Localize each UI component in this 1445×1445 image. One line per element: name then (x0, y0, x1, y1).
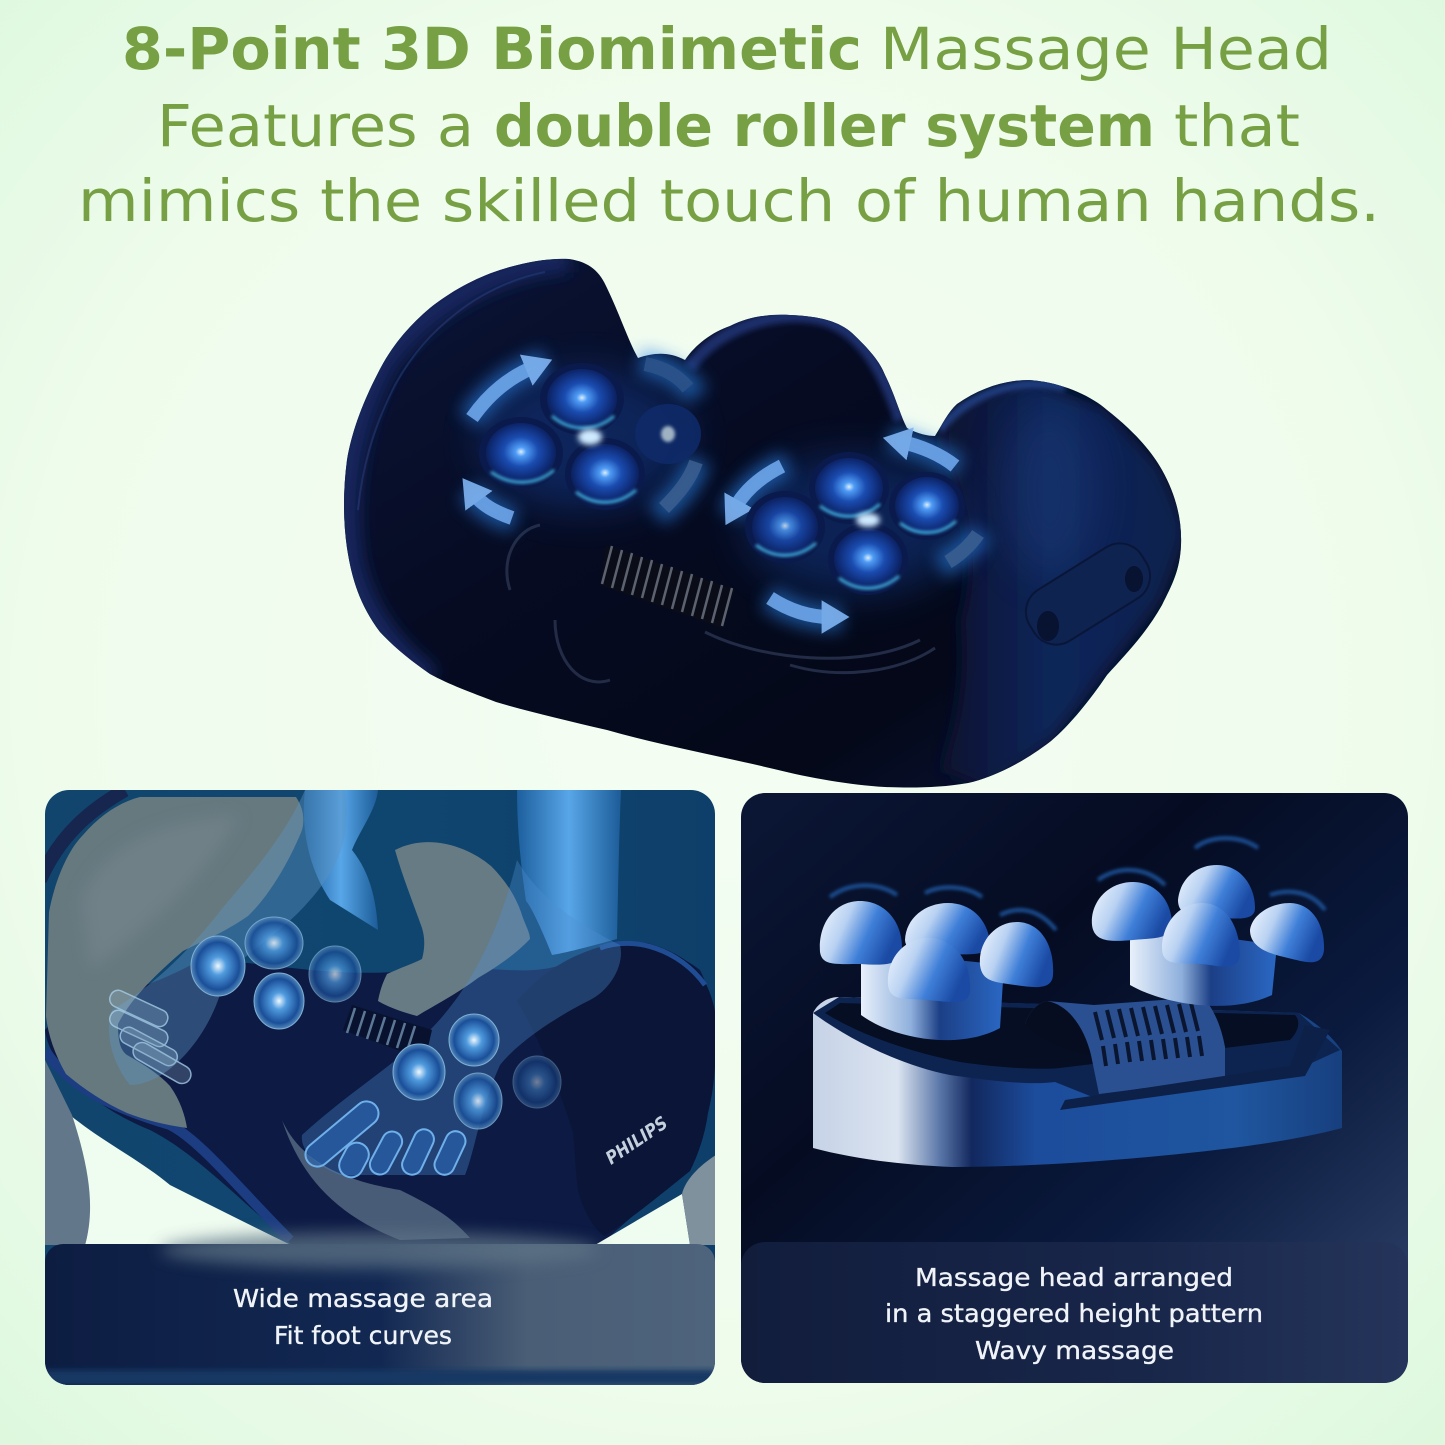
roller (565, 438, 645, 510)
arrow (735, 466, 782, 508)
arrow (472, 367, 534, 418)
main product: foot massager (344, 259, 1190, 790)
right lobe sheen (1005, 405, 1095, 575)
card illustration (40, 789, 716, 1385)
left roller group (479, 363, 701, 510)
arrow (474, 494, 512, 518)
roller (309, 946, 361, 1002)
card background (741, 793, 1408, 1383)
right lobe rim (940, 384, 1065, 430)
left smudge (45, 1060, 90, 1245)
title line 3: mimics the skilled touch of human hands. (78, 167, 1380, 235)
right toes (304, 1100, 466, 1178)
bold part: 8-Point 3D Biomimetic (122, 15, 862, 83)
left toes (107, 988, 194, 1087)
left hub (861, 950, 1004, 1040)
arrow (770, 598, 830, 617)
right dark lobe (517, 942, 716, 1236)
arrow (902, 442, 955, 466)
roller (809, 452, 889, 524)
arrow (645, 364, 688, 388)
glow paths (470, 362, 980, 618)
spring body (600, 545, 735, 628)
left lobe rim (347, 259, 569, 680)
base platform (813, 997, 1342, 1167)
caption line: Wavy massage (975, 1336, 1174, 1365)
left lobe lighter centre (90, 827, 218, 950)
base top surface (825, 1003, 1298, 1069)
toe (109, 1010, 169, 1048)
caption line: Massage head arranged (915, 1263, 1233, 1292)
dome (1178, 865, 1255, 919)
caption (885, 1263, 1263, 1365)
dome (888, 938, 970, 1002)
roller (540, 363, 624, 435)
roller (828, 523, 908, 595)
right leg (517, 789, 621, 955)
caption bar (741, 1242, 1408, 1383)
lobe seam (358, 272, 545, 510)
top left dark rim (40, 790, 125, 880)
arrow glow (470, 362, 980, 618)
arrow strokes (472, 364, 978, 617)
roller (449, 1014, 499, 1066)
bar bottom edge (45, 1370, 715, 1385)
card illustration (741, 838, 1408, 1383)
coils (347, 1008, 415, 1051)
side button plate (1016, 534, 1160, 654)
cage opening (1025, 1001, 1091, 1055)
glow behind right roller group (745, 455, 965, 595)
button right (1125, 566, 1143, 592)
title line 1 (122, 15, 1332, 83)
left leg (304, 790, 378, 930)
right head domes (1092, 865, 1324, 967)
internal mechanism lines (507, 525, 935, 682)
roller (889, 472, 965, 540)
toe (120, 1026, 178, 1066)
regular part: that (1174, 92, 1300, 160)
panel: wide massage area (40, 789, 716, 1385)
arrow (948, 534, 978, 562)
title line 2 (157, 92, 1300, 160)
left head domes (820, 901, 1053, 1002)
toe (304, 1100, 380, 1168)
roller (454, 1073, 502, 1129)
center sparkle (856, 513, 880, 527)
spring (343, 1005, 432, 1051)
panel: staggered massage head (741, 793, 1408, 1383)
dome (905, 903, 990, 954)
roller (191, 936, 245, 996)
bar shading (160, 1232, 600, 1268)
right side bracket (1060, 1025, 1330, 1110)
light background right (595, 1194, 690, 1245)
dome (980, 922, 1053, 987)
toe (368, 1130, 404, 1176)
right roller group (745, 452, 965, 595)
dome (1092, 882, 1172, 941)
dome (1250, 903, 1324, 962)
right hub (1130, 925, 1277, 1006)
spring cage (1025, 997, 1225, 1094)
regular part: Massage Head (880, 15, 1332, 83)
dome (820, 901, 902, 965)
middle lobe translucent (378, 842, 530, 1016)
card background (45, 790, 715, 1385)
lobe rim blue (45, 1050, 290, 1240)
motion arcs (830, 838, 1325, 930)
roller (479, 417, 563, 489)
dark massager body (45, 949, 714, 1245)
toe (434, 1130, 466, 1176)
spring body (343, 1005, 432, 1051)
toe (401, 1128, 435, 1176)
roller (393, 1044, 445, 1100)
right smudge (682, 1155, 716, 1245)
arcs (830, 838, 1325, 930)
massager body (344, 259, 1181, 788)
title (78, 15, 1380, 235)
bottom caption bar (45, 1244, 715, 1385)
lower translucent lobe (282, 1120, 470, 1240)
roller (745, 491, 825, 563)
cage shell (1025, 997, 1225, 1094)
roller (245, 917, 303, 969)
brand label: PHILIPS (602, 1113, 672, 1169)
dome (1162, 903, 1240, 967)
rollers (191, 917, 561, 1129)
caption line: Wide massage area (233, 1284, 493, 1313)
toe (109, 990, 169, 1028)
body shading (347, 259, 1190, 790)
roller (513, 1056, 561, 1108)
spring mechanism (600, 545, 735, 628)
right leg glass (302, 860, 621, 1175)
chassis arcs (507, 525, 935, 682)
bold part: double roller system (494, 92, 1155, 160)
left lobe translucent (46, 797, 303, 1128)
spring coils (602, 546, 732, 626)
light background left (70, 1115, 291, 1245)
center sparkle (578, 429, 602, 445)
left leg glass (109, 790, 347, 1085)
caption line: in a staggered height pattern (885, 1299, 1263, 1328)
rotation arrows (470, 362, 980, 618)
roller (254, 973, 304, 1029)
toe (338, 1142, 370, 1178)
caption line: Fit foot curves (274, 1321, 452, 1350)
glow behind left roller group (480, 370, 690, 510)
arrow (664, 462, 696, 508)
regular part: Features a (157, 92, 474, 160)
right lobe (935, 380, 1190, 790)
cage slots (1095, 1003, 1202, 1066)
roller (635, 404, 701, 464)
middle lobe rim (690, 316, 900, 420)
caption (233, 1284, 493, 1350)
base rim (813, 997, 1340, 1100)
plate (1016, 534, 1160, 654)
button left (1037, 611, 1059, 641)
toe (132, 1042, 192, 1084)
right lobe blue edge (600, 943, 705, 985)
